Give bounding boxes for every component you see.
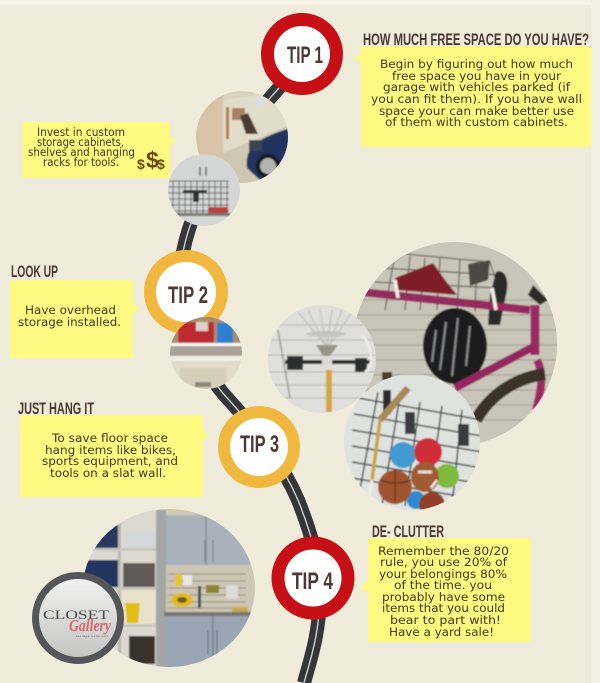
heading: de-clutter: DE- CLUTTER — [372, 522, 444, 541]
icon: dollar signs: $ — [137, 156, 145, 172]
tip 2 badge — [150, 256, 222, 328]
callout: tip 3 text: hang items like bikes, — [45, 443, 176, 457]
callout: invest in storage — [22, 122, 176, 178]
tip 2 badge: TIP 2 — [168, 282, 208, 309]
callout: tip 4 text: items that you could — [382, 601, 505, 615]
icon: dollar signs: $ — [157, 156, 165, 172]
photo: garage with car — [196, 91, 288, 183]
callout: tip 1 text: of them with custom cabinets. — [385, 115, 568, 129]
callout: invest in storage: Invest in custom — [37, 125, 125, 139]
callout: tip 4 text — [360, 538, 531, 642]
icon: dollar signs — [137, 147, 165, 173]
callout: tip 4 text: rule, you use 20% of — [380, 555, 508, 569]
callout: tip 4 text: probably have some — [382, 590, 505, 604]
logo: Closet Gallery: Gallery — [69, 616, 111, 635]
photo: overhead storage — [170, 317, 242, 389]
callout: tip 2 text — [10, 280, 139, 358]
photo: wire grid wall — [168, 154, 240, 226]
callout: tip 4 text: Remember the 80/20 — [378, 544, 509, 558]
tip 4 badge — [278, 543, 348, 613]
callout: invest in storage: shelves and hanging — [28, 145, 135, 159]
callout: tip 1 text: garage with vehicles parked (if — [383, 80, 571, 94]
heading: look up: LOOK UP — [11, 262, 58, 281]
winding road — [182, 78, 320, 683]
callout: tip 4 text: Have a yard sale! — [389, 625, 494, 639]
tip 3 badge: TIP 3 — [240, 431, 279, 458]
tip 1 badge: TIP 1 — [287, 42, 323, 69]
callout: invest in storage: racks for tools. — [43, 155, 119, 169]
heading: just hang it: JUST HANG IT — [18, 399, 94, 418]
logo: Closet Gallery: CLOSET — [43, 607, 109, 622]
photo: cabinets with shelving — [80, 508, 258, 671]
tip 3 badge — [224, 412, 294, 482]
callout: tip 4 text: bear to part with! — [390, 613, 501, 627]
callout: tip 1 text: you can fit them). If you have wall — [371, 92, 582, 106]
callout: tip 4 text: your belongings 80% — [379, 567, 507, 581]
callout: tip 1 text: Begin by figuring out how much — [380, 57, 573, 71]
photo: sports equipment on grid — [344, 374, 480, 510]
callout: tip 2 text: Have overhead — [25, 303, 116, 317]
callout: tip 3 text: To save floor space — [51, 431, 168, 445]
icon: dollar signs: $ — [146, 147, 159, 173]
tip 4 badge: TIP 4 — [292, 568, 333, 595]
callout: tip 3 text — [20, 415, 208, 497]
callout: tip 3 text: tools on a slat wall. — [50, 466, 166, 480]
logo: Closet Gallery — [36, 576, 120, 660]
callout: tip 1 text: free space you have in your — [392, 69, 561, 83]
callout: tip 3 text: sports equipment, and — [42, 454, 178, 468]
photo: rake on slat wall — [265, 305, 380, 415]
logo: Closet Gallery: storage solutions — [76, 634, 108, 638]
callout: tip 2 text: storage installed. — [18, 315, 121, 329]
callout: tip 1 text — [354, 46, 591, 147]
callout: invest in storage: storage cabinets, — [37, 135, 124, 149]
callout: tip 4 text: of the time. you — [394, 578, 492, 592]
tip 1 badge — [268, 20, 336, 88]
photo: bike on slat wall — [350, 240, 560, 450]
callout: tip 1 text: space your can make better use — [379, 104, 574, 118]
